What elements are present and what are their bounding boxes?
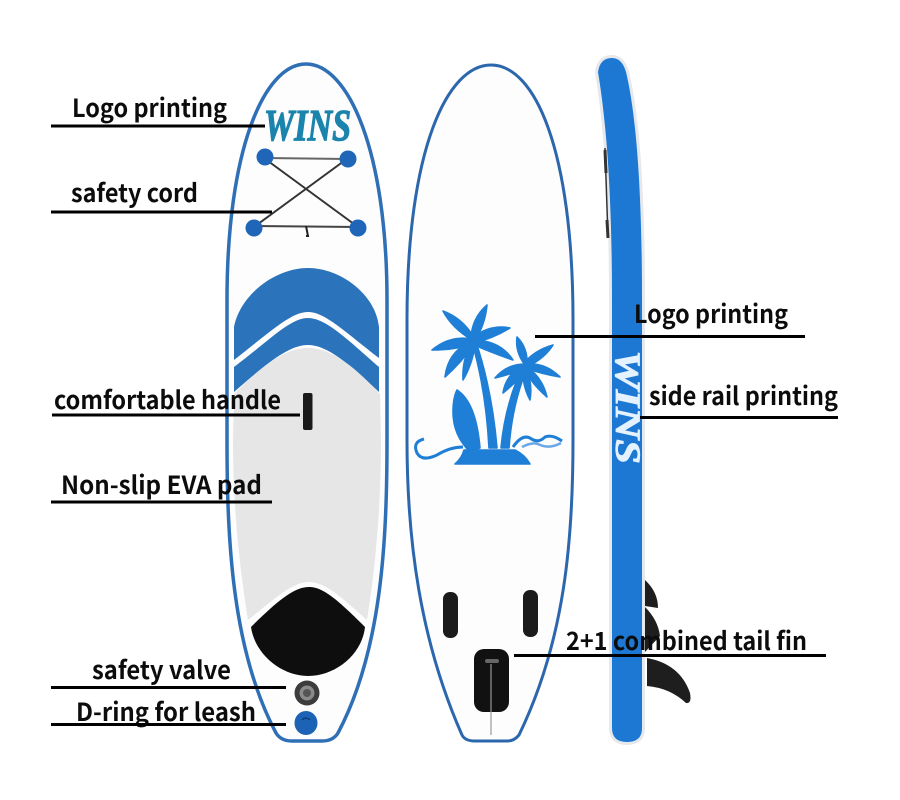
- side rail blue: [598, 58, 642, 742]
- label: Logo printing (bottom): Logo printing: [634, 295, 788, 331]
- island: [455, 450, 530, 464]
- safety valve: [294, 680, 320, 706]
- black tail pad: [251, 587, 365, 676]
- small palm fronds: [517, 337, 527, 365]
- palm tree logo: [416, 305, 562, 464]
- blue chevron upper: [234, 268, 379, 360]
- board: side view: [598, 58, 690, 742]
- label: safety valve: safety valve: [92, 651, 231, 687]
- rail handle detail: [605, 148, 608, 238]
- blue chevron lower: [234, 318, 379, 392]
- right waves: [513, 436, 562, 447]
- board: top deck view: [227, 64, 387, 741]
- left wave: [416, 439, 463, 458]
- side rail white edge: [598, 58, 642, 742]
- logo: WINS: WINS: [264, 101, 351, 150]
- label: D-ring for leash: D-ring for leash: [76, 693, 256, 729]
- label: side rail printing: side rail printing: [649, 377, 838, 413]
- bottom outline: [407, 65, 573, 741]
- center fin box: [474, 649, 509, 735]
- side rail printing: WINS: WINS: [608, 350, 648, 464]
- board: bottom view: [407, 65, 573, 741]
- label: Logo printing (bottom): [535, 295, 805, 338]
- label: comfortable handle: comfortable handle: [54, 381, 281, 417]
- side fin box right: [523, 590, 538, 637]
- label: safety valve: [51, 651, 286, 689]
- label: safety cord: [51, 174, 272, 214]
- label: safety cord: safety cord: [71, 174, 198, 210]
- label: Non-slip EVA pad: Non-slip EVA pad: [61, 466, 262, 502]
- label: 2+1 combined tail fin: 2+1 combined tail fin: [566, 622, 807, 658]
- big palm fronds: [443, 311, 473, 340]
- surfboard: [453, 390, 480, 452]
- D-ring for leash: [294, 711, 318, 735]
- safety cord with four anchors: [246, 148, 366, 236]
- side fin box left: [443, 592, 458, 638]
- deck outline: [227, 64, 387, 741]
- fins: [645, 580, 690, 703]
- grey EVA pad: [233, 348, 381, 620]
- trunks: [472, 342, 497, 448]
- comfortable handle: [303, 393, 312, 430]
- label: Logo printing (deck): Logo printing: [72, 89, 227, 125]
